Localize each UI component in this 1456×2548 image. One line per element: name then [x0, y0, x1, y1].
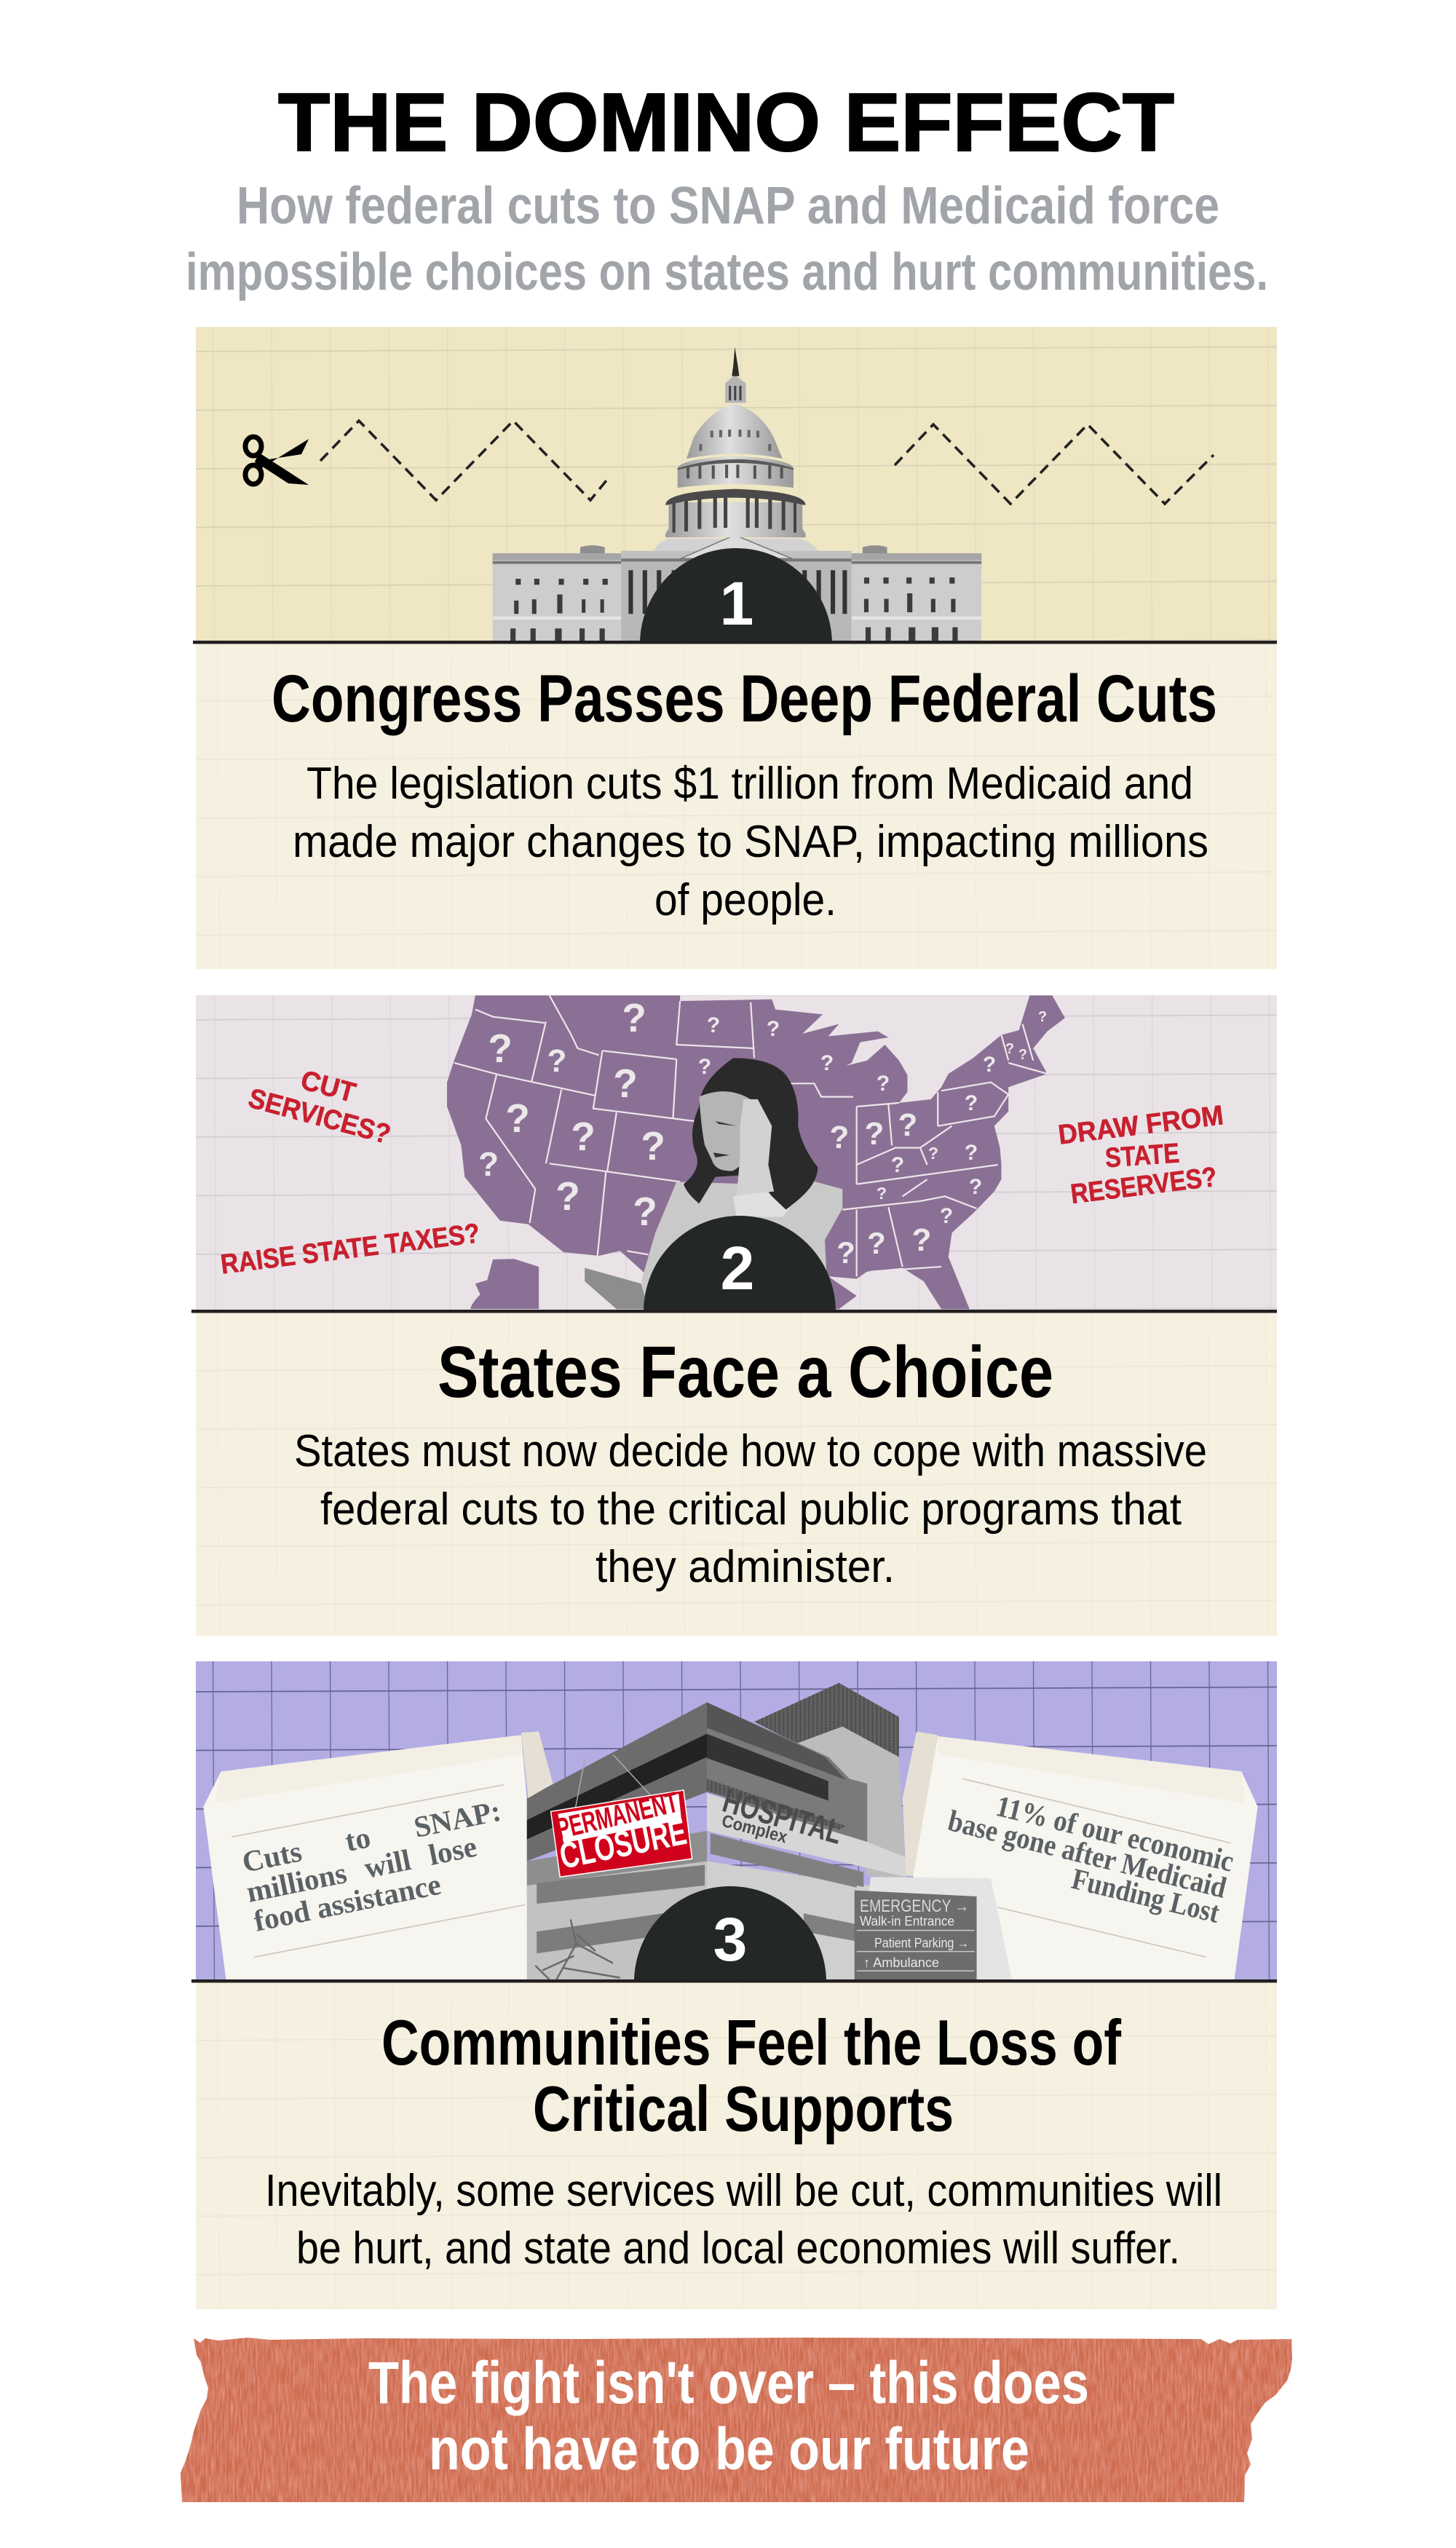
wayfinding sign: Walk-in Entrance — [860, 1914, 954, 1928]
option label: cut services: CUT — [298, 1065, 359, 1109]
body text 1: The legislation cuts $1 trillion from Medicaid and — [306, 759, 1193, 809]
question marks on map: ? — [1038, 1009, 1047, 1025]
number 1: 1 — [720, 569, 753, 638]
woman looking at tablet — [585, 1058, 842, 1310]
question marks on map: ? — [505, 1096, 530, 1141]
hospital building — [527, 1683, 906, 1979]
dashed cut line left — [320, 421, 606, 500]
question marks on map: ? — [877, 1072, 890, 1096]
heading 1: Congress Passes Deep Federal Cuts — [272, 662, 1217, 736]
lower hospital wall between papers — [857, 1886, 906, 1979]
question marks on map: ? — [641, 1123, 665, 1168]
body text 1: made major changes to SNAP, impacting millions — [293, 817, 1208, 867]
question marks on map: ? — [836, 1235, 855, 1270]
option label: draw from state reserves — [1056, 1100, 1225, 1210]
question marks on map: ? — [969, 1175, 982, 1199]
headline right: base gone after Medicaid — [945, 1803, 1230, 1904]
step number badge 3 — [634, 1886, 826, 2078]
subtitle: How federal cuts to SNAP and Medicaid force — [237, 177, 1219, 235]
question marks on map: ? — [940, 1204, 953, 1228]
building lettering — [719, 1781, 847, 1851]
torn paper strip — [181, 2338, 1292, 2502]
question marks on map: ? — [633, 1189, 657, 1234]
question marks on map: ? — [983, 1053, 996, 1077]
question marks on map — [478, 995, 1047, 1270]
permanent closure sign: CLOSURE — [556, 1811, 690, 1877]
question marks on map: ? — [867, 1226, 886, 1260]
wayfinding sign: Patient Parking → — [874, 1936, 969, 1950]
panel: step 1 congress — [193, 327, 1277, 969]
option label: draw from state reserves: STATE — [1104, 1138, 1180, 1174]
state borders — [454, 995, 1048, 1276]
permanent closure sign — [551, 1754, 692, 1877]
newspaper right — [903, 1731, 1258, 1979]
headline right: 11% of our economic — [993, 1789, 1237, 1878]
body text 1: of people. — [654, 875, 836, 925]
body text 3 — [265, 2166, 1222, 2274]
alaska — [470, 1259, 539, 1309]
heading 3: Communities Feel the Loss of — [381, 2006, 1122, 2078]
question marks on map: ? — [1018, 1047, 1027, 1063]
question marks on map: ? — [891, 1153, 904, 1177]
headline left — [240, 1794, 504, 1938]
wayfinding sign: ↑ Ambulance — [863, 1955, 939, 1970]
option label: raise state taxes: RAISE STATE TAXES? — [219, 1218, 481, 1281]
question marks on map: ? — [707, 1013, 720, 1037]
body text 3: Inevitably, some services will be cut, communities will — [265, 2166, 1222, 2216]
dashed cut line right — [895, 424, 1214, 504]
permanent closure sign: PERMANENT — [553, 1787, 681, 1845]
body text 1 — [293, 759, 1208, 925]
body text 2: States must now decide how to cope with massive — [294, 1426, 1207, 1476]
question marks on map: ? — [928, 1144, 938, 1163]
subtitle — [186, 177, 1268, 301]
icon: scissors — [245, 437, 309, 485]
capitol building — [493, 347, 981, 641]
question marks on map: ? — [965, 1141, 978, 1165]
newspaper left — [203, 1731, 553, 1979]
question marks on map: ? — [1005, 1041, 1014, 1057]
banner: call to action — [181, 2338, 1292, 2502]
option label: draw from state reserves: RESERVES? — [1069, 1162, 1219, 1210]
number 2: 2 — [721, 1234, 754, 1302]
question marks on map: ? — [555, 1174, 580, 1219]
option label: cut services: SERVICES? — [245, 1083, 394, 1150]
step number badge 2 — [644, 1216, 836, 1408]
heading 3 — [381, 2006, 1122, 2145]
question marks on map: ? — [767, 1017, 780, 1041]
question marks on map: ? — [488, 1026, 513, 1071]
banner: call to action: not have to be our future — [429, 2416, 1029, 2482]
title: THE DOMINO EFFECT — [278, 76, 1174, 168]
question marks on map: ? — [912, 1222, 931, 1258]
heading 2: States Face a Choice — [438, 1332, 1053, 1413]
building lettering: Complex — [719, 1811, 790, 1848]
question marks on map: ? — [865, 1116, 884, 1152]
headline left: Cuts to SNAP: — [240, 1794, 504, 1879]
body text 2 — [294, 1426, 1207, 1592]
question marks on map: ? — [898, 1107, 917, 1143]
wayfinding sign: EMERGENCY → — [860, 1896, 969, 1916]
body text 2: federal cuts to the critical public programs that — [320, 1484, 1182, 1535]
headline left: millions will lose — [244, 1829, 480, 1909]
building lettering: HOSPITAL — [719, 1781, 847, 1851]
tree — [535, 1920, 620, 1979]
number 3: 3 — [713, 1905, 747, 1974]
question marks on map: ? — [571, 1114, 596, 1159]
panel: step 2 states — [191, 995, 1277, 1636]
map of the united states — [447, 995, 1065, 1309]
question marks on map: ? — [698, 1055, 711, 1079]
question marks on map: ? — [830, 1120, 849, 1155]
heading 3: Critical Supports — [533, 2073, 954, 2145]
question marks on map: ? — [877, 1184, 887, 1203]
question marks on map: ? — [613, 1061, 638, 1106]
wayfinding sign — [855, 1877, 1012, 1979]
question marks on map: ? — [820, 1051, 834, 1075]
subtitle: impossible choices on states and hurt communities. — [186, 243, 1268, 301]
headline left: food assistance — [251, 1867, 443, 1938]
question marks on map: ? — [547, 1043, 566, 1079]
banner text: The fight isn't over – this does — [368, 2350, 1089, 2416]
question marks on map: ? — [622, 995, 646, 1040]
panel: step 3 communities — [191, 1661, 1277, 2309]
step number badge 1 — [640, 548, 832, 740]
body text 3: be hurt, and state and local economies will suffer. — [296, 2223, 1180, 2274]
body text 2: they administer. — [596, 1542, 895, 1592]
question marks on map: ? — [478, 1145, 499, 1183]
option label: draw from state reserves: DRAW FROM — [1056, 1100, 1225, 1151]
headline right: Funding Lost — [1069, 1861, 1223, 1929]
question marks on map: ? — [965, 1091, 978, 1115]
